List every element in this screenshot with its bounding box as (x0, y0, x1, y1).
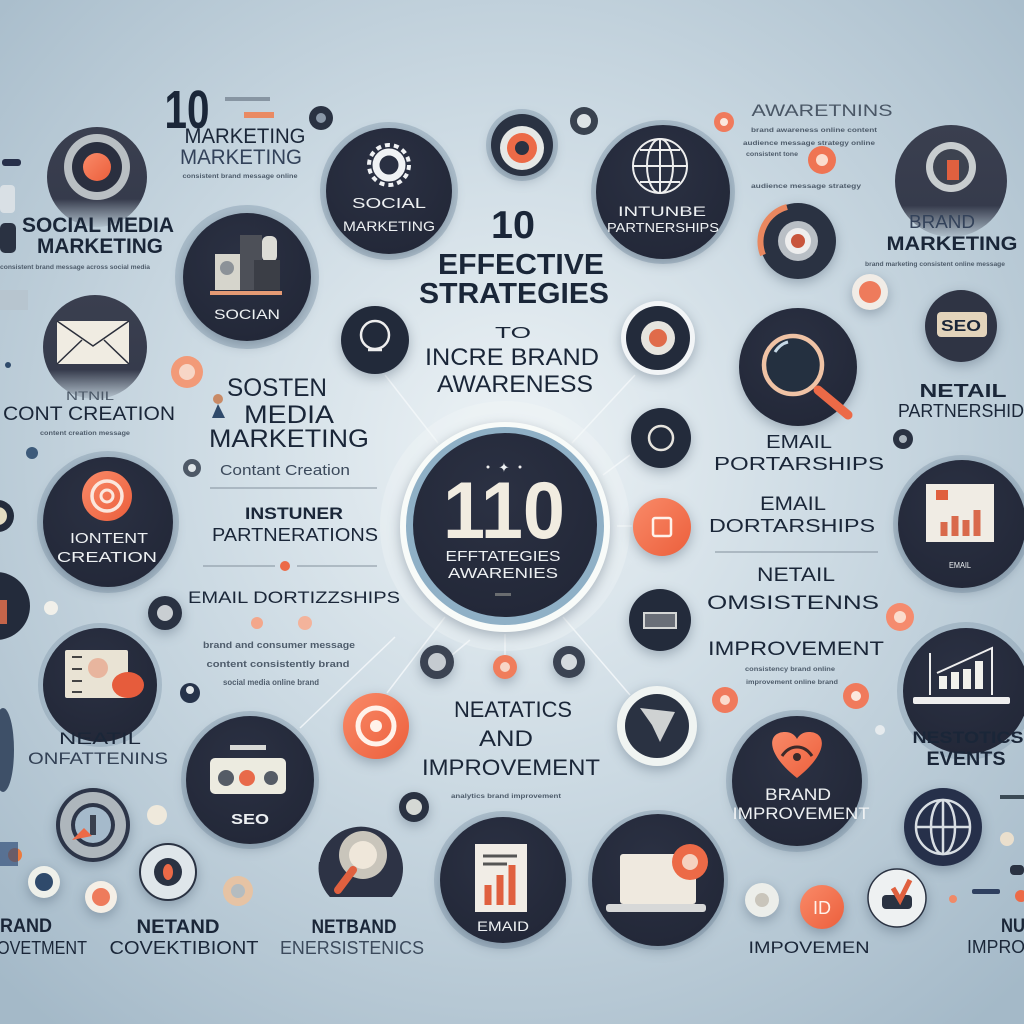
panel: analytics chart right (897, 622, 1024, 770)
title: STRATEGIES (419, 278, 609, 310)
panel: social media marketing: consistent brand message across social media (0, 265, 151, 271)
panel: envelope content creation: content creation message (40, 431, 131, 437)
text block: awareness top right: brand awareness online content (751, 128, 877, 134)
text block: awareness top right: consistent tone (746, 152, 799, 158)
panel: envelope content creation: CONT CREATION (3, 404, 175, 425)
text block: social media marketing middle: Contant Creation (220, 462, 350, 479)
title: AWARENESS (437, 371, 593, 398)
text block: awareness top right: AWARETNINS (752, 101, 892, 120)
panel: social camera (175, 205, 319, 349)
panel: brand marketing: brand marketing consistent online message (865, 262, 1006, 268)
text block: email partnerships right: PORTARSHIPS (714, 454, 884, 474)
panel: brand improvement heart (726, 710, 870, 852)
text block: social media marketing middle (209, 374, 369, 479)
text block: partnerships left: INSTUNER (245, 504, 343, 523)
icon: bottom right badges: ID (813, 898, 831, 918)
text block: analytics and improvement: AND (479, 726, 533, 751)
top left heading: consistent brand message online (182, 174, 298, 180)
text block: bottom labels: OVETMENT (0, 938, 87, 958)
title (419, 204, 609, 398)
text block: retail partnerships right: NETAIL (920, 381, 1006, 401)
text block: consistency improvement: NETAIL (757, 565, 835, 586)
panel: brand marketing: BRAND (909, 212, 975, 232)
text block: awareness top right (743, 101, 892, 190)
icon: dark small badges left (148, 596, 585, 703)
icon: small grey badges top (309, 106, 836, 174)
text block: consistency improvement: improvement online brand (746, 680, 838, 686)
icon: leaf badge (341, 306, 409, 374)
panel: magnifier (739, 308, 857, 426)
text block: email partnerships right: EMAIL (760, 494, 826, 515)
panel: social marketing gear: SOCIAL (352, 195, 426, 212)
top left heading: MARKETING (180, 146, 302, 169)
panel: content creation: IONTENT (70, 530, 148, 547)
text block: bottom labels: NETAND (136, 917, 220, 938)
panel: brand improvement heart: BRAND (765, 785, 831, 804)
panel: center badge: ✦ (499, 460, 510, 475)
panel: envelope content creation: NTNIL (66, 389, 114, 403)
text block: awareness top right: audience message strategy (751, 184, 862, 190)
panel: email chart right (893, 455, 1024, 593)
panel: email report: EMAID (477, 918, 529, 934)
text block: bottom labels: ENERSISTENICS (280, 938, 424, 958)
icon: orange accents right (712, 274, 914, 735)
text block: email left: content consistently brand (206, 659, 350, 669)
text block: consistency improvement: consistency brand online (745, 667, 836, 673)
panel: center badge (380, 401, 630, 651)
icon: side badges (621, 301, 695, 651)
panel: social media marketing: MARKETING (37, 235, 163, 258)
panel: envelope content creation (3, 295, 175, 437)
panel: analytics chart right: EVENTS (926, 749, 1006, 770)
title: INCRE BRAND (425, 344, 599, 371)
panel: center badge: 110 (443, 466, 565, 556)
text block: partnerships left (212, 504, 378, 545)
text block: email partnerships right (709, 432, 884, 536)
panel: email laptop card: ONFATTENINS (28, 749, 168, 768)
text block: social media marketing middle: SOSTEN (227, 374, 327, 402)
panel: seo badge (925, 290, 997, 362)
title: EFFECTIVE (438, 249, 604, 281)
panel: seo badge: SEO (941, 318, 981, 335)
panel: center badge: AWARENIES (448, 565, 558, 582)
panel: brand improvement heart: IMPROVEMENT (732, 804, 870, 823)
edge badges left (0, 356, 203, 792)
panel: laptop with gear (588, 810, 728, 950)
panel: content creation (37, 451, 179, 593)
text block: email left (188, 561, 400, 687)
panel: social marketing gear (320, 122, 458, 260)
text block: awareness top right: audience message strategy online (743, 141, 876, 147)
panel: social media marketing: SOCIAL MEDIA (22, 214, 174, 237)
text block: social media marketing middle: MEDIA (244, 401, 334, 429)
icon: bottom right badges (745, 795, 1024, 929)
text block: partnerships left: PARTNERATIONS (212, 525, 378, 545)
text block: social media marketing middle: MARKETING (209, 425, 369, 453)
text block: retail partnerships right: PARTNERSHID (898, 401, 1024, 421)
connector lines (203, 375, 878, 728)
text block: email left: EMAIL DORTIZZSHIPS (188, 588, 400, 607)
panel: seo (181, 711, 319, 849)
text block: email left: social media online brand (223, 678, 319, 687)
panel: globe (904, 788, 982, 866)
top left heading: 10 (164, 80, 210, 140)
panel: email laptop card: NEATIL (59, 729, 141, 748)
title: 10 (491, 204, 535, 247)
text block: email partnerships right: DORTARSHIPS (709, 516, 875, 536)
panel: influencer partnerships: PARTNERSHIPS (607, 220, 719, 235)
panel: social media marketing (0, 127, 174, 271)
panel: center badge: EFFTATEGIES (446, 548, 560, 565)
text block: bottom labels: IMPOVEMEN (748, 938, 870, 957)
icon: person small (26, 394, 225, 477)
panel: target and search icons (0, 788, 429, 913)
panel: analytics chart right: NESTOTICS (912, 728, 1024, 747)
text block: analytics and improvement (422, 697, 600, 800)
top left heading: MARKETING (184, 125, 306, 148)
panel: email laptop card (28, 623, 168, 768)
icon: search badge (319, 827, 403, 897)
text block: email partnerships right: EMAIL (766, 432, 832, 452)
text block: bottom labels: RAND (0, 916, 52, 937)
panel: content creation: CREATION (57, 549, 157, 566)
text block: consistency improvement (707, 565, 884, 686)
icon: orange spiral badge (343, 693, 409, 759)
panel: influencer partnerships: INTUNBE (618, 203, 706, 219)
text block: bottom labels: NETBAND (312, 917, 396, 938)
text block: consistency improvement: IMPROVEMENT (708, 639, 884, 660)
panel: email report (434, 811, 572, 949)
text block: retail partnerships right (898, 381, 1024, 421)
panel: brand marketing: MARKETING (886, 234, 1018, 255)
panel: influencer partnerships (591, 120, 735, 264)
top left heading (164, 80, 306, 180)
icon: bird badge (617, 686, 697, 766)
panel: social marketing gear: MARKETING (343, 218, 435, 234)
text block: analytics and improvement: analytics brand improvement (451, 794, 561, 800)
panel: brand marketing (865, 125, 1018, 268)
text block: analytics and improvement: NEATATICS (454, 697, 572, 722)
text block: consistency improvement: OMSISTENNS (707, 593, 879, 614)
text block: email left: brand and consumer message (203, 640, 355, 650)
left edge icons (0, 159, 28, 368)
text block: bottom labels (0, 916, 1024, 958)
title: TO (495, 325, 531, 342)
icon: camera badge (760, 203, 836, 279)
text block: bottom labels: COVEKTIBIONT (110, 938, 259, 958)
panel: seo: SEO (231, 811, 269, 828)
panel: social camera: SOCIAN (214, 306, 280, 322)
icon: orange ring badge (486, 109, 558, 181)
panel: email chart right: EMAIL (949, 561, 971, 570)
text block: analytics and improvement: IMPROVEMENT (422, 755, 600, 780)
